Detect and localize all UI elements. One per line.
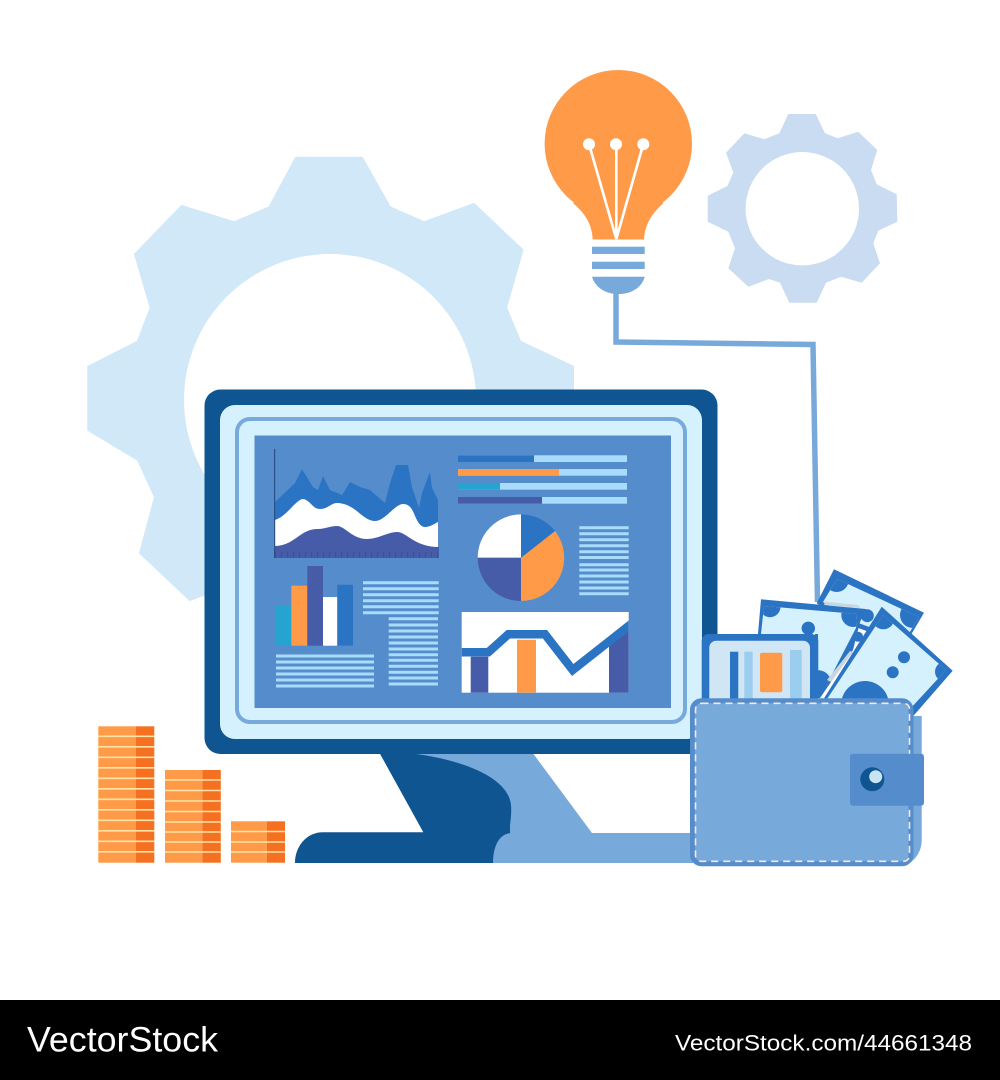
icon: large gear — [88, 158, 573, 648]
wallet stitching — [696, 703, 910, 861]
connector wire from bulb to wallet — [616, 290, 818, 602]
banknote back — [816, 569, 924, 634]
icon: small gear — [708, 114, 897, 303]
icon: coin stacks — [98, 726, 285, 863]
coin stack 1 — [98, 726, 154, 863]
text lines: beside bars right column — [389, 619, 438, 684]
combo chart — [455, 612, 635, 693]
coin stack 2 — [165, 770, 221, 863]
filament — [583, 138, 649, 239]
bulb base — [592, 247, 645, 294]
wallet back edge — [905, 716, 922, 866]
icon: light bulb — [545, 70, 692, 294]
footer bar — [0, 1000, 1000, 1080]
wallet front — [692, 701, 911, 864]
footer image id: VectorStock.com/44661348 — [675, 1031, 972, 1056]
monitor bezel — [204, 390, 718, 754]
footer logo text: VectorStock — [27, 1021, 219, 1060]
area chart — [274, 449, 439, 558]
text lines: beside pie — [579, 528, 629, 594]
banknote shadow — [824, 602, 860, 608]
monitor — [204, 390, 718, 754]
bar chart — [276, 566, 353, 646]
monitor stand — [295, 752, 700, 863]
card — [702, 634, 818, 714]
text lines: beside bars upper — [363, 583, 439, 613]
banknote front — [824, 606, 953, 716]
progress bars — [458, 455, 627, 504]
banknote middle — [758, 596, 874, 698]
screen — [254, 436, 671, 708]
inset frame — [237, 419, 685, 722]
icon: wallet with money and card — [692, 568, 955, 866]
text lines: below bars — [276, 656, 374, 686]
coin stack 3 — [231, 821, 285, 863]
wallet clasp — [850, 754, 924, 806]
monitor face — [220, 405, 702, 739]
bulb glass — [545, 70, 692, 240]
pie chart — [478, 514, 564, 601]
